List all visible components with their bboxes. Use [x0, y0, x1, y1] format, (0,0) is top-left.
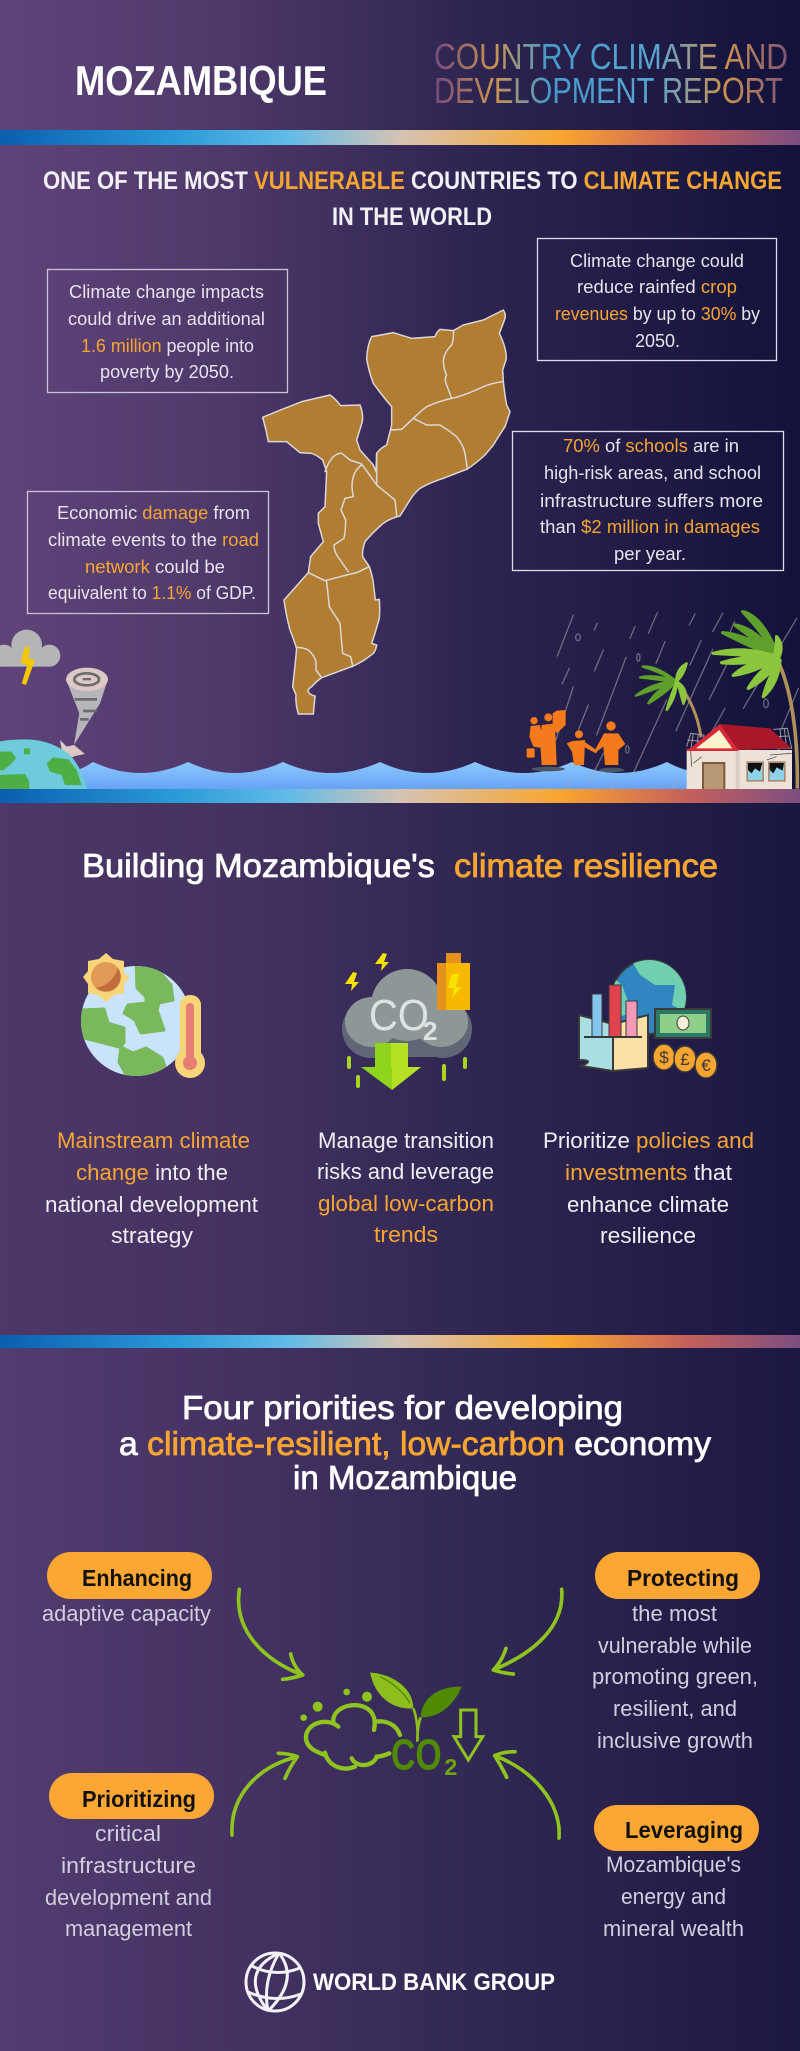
heading: four priorities: a climate-resilient, low-carbon economy: [119, 1425, 712, 1462]
priority: protecting: inclusive growth: [597, 1728, 753, 1753]
arrow: bottom left: [232, 1753, 297, 1835]
leaves: [370, 1673, 462, 1742]
callout: schools: per year.: [614, 544, 686, 564]
down arrow: [454, 1710, 483, 1760]
priority: leveraging: Mozambique's: [606, 1852, 741, 1877]
text: mainstream climate change: change into the: [76, 1160, 228, 1185]
text: mainstream climate change: strategy: [111, 1223, 193, 1248]
callout: schools: 70% of schools are in: [563, 436, 739, 456]
CO2 text: CO: [391, 1731, 442, 1779]
priority: prioritizing: Prioritizing: [82, 1786, 196, 1812]
icon: finance and world: $: [659, 1048, 669, 1067]
priority: protecting: the most: [632, 1601, 717, 1626]
priority: enhancing: [42, 1552, 212, 1626]
callout: road network: Economic damage from: [57, 503, 250, 523]
priority: prioritizing: critical: [95, 1821, 161, 1846]
icon: damaged house: [687, 724, 792, 790]
priority: leveraging: mineral wealth: [603, 1916, 744, 1941]
callout: crop revenues: Climate change could: [570, 251, 744, 271]
priority: prioritizing: management: [65, 1916, 192, 1941]
icon: small palm tree: [636, 663, 701, 737]
heading: four priorities: Four priorities for developing: [182, 1389, 623, 1426]
icon: finance and world: £: [680, 1050, 690, 1069]
priority: leveraging: [594, 1805, 759, 1941]
arrows to CO2 icon: [232, 1589, 562, 1838]
priority: protecting: resilient, and: [613, 1696, 737, 1721]
text: prioritize policies: Prioritize policies and: [543, 1128, 754, 1153]
priority: enhancing: Enhancing: [82, 1565, 192, 1591]
icon: tornado: [66, 668, 108, 745]
text: prioritize policies: resilience: [600, 1223, 696, 1248]
callout: poverty: Climate change impacts: [69, 282, 264, 302]
arrow: top right: [493, 1589, 562, 1674]
header: [75, 36, 788, 111]
report title: [434, 36, 788, 111]
callout: road network: climate events to the road: [48, 530, 259, 550]
priority: protecting: [592, 1552, 760, 1753]
callout: poverty: 1.6 million people into: [81, 336, 254, 356]
icon: CO2 reduction plant: [300, 1673, 483, 1780]
text: mainstream climate change: national development: [45, 1192, 258, 1217]
text: mainstream climate change: [45, 1128, 258, 1248]
cloud outline: [306, 1705, 400, 1769]
icon: warming globe: [80, 953, 205, 1082]
callout: poverty: [48, 270, 288, 392]
icon: large palm tree: [713, 612, 797, 789]
heading: most vulnerable countries: [43, 167, 782, 231]
callout: schools: [512, 432, 784, 570]
text: manage transition risks: trends: [374, 1222, 438, 1247]
priority: protecting: Protecting: [627, 1565, 739, 1591]
text: prioritize policies: enhance climate: [567, 1192, 729, 1217]
priority: leveraging: energy and: [621, 1884, 726, 1909]
priority: enhancing: adaptive capacity: [42, 1601, 211, 1626]
title: Mozambique: MOZAMBIQUE: [75, 57, 327, 104]
heading: four priorities: [119, 1389, 712, 1496]
map of Mozambique: [263, 310, 510, 714]
heading: most vulnerable countries: IN THE WORLD: [332, 203, 492, 231]
callout: schools: high-risk areas, and school: [544, 463, 761, 483]
heading: most vulnerable countries: ONE OF THE MOST VULNERABLE COUNTRIES TO CLIMATE CHANGE: [43, 167, 782, 195]
rain: [556, 613, 798, 788]
text: manage transition risks: Manage transition: [318, 1128, 494, 1153]
priority: prioritizing: [45, 1773, 214, 1941]
callout: crop revenues: reduce rainfed crop: [577, 277, 737, 297]
icon: CO2 cloud and battery: [342, 953, 472, 1090]
text: manage transition risks: risks and leverage: [317, 1159, 494, 1184]
heading: four priorities: in Mozambique: [293, 1459, 517, 1496]
callout: poverty: could drive an additional: [68, 309, 265, 329]
text: manage transition risks: global low-carbon: [318, 1191, 494, 1216]
priority: prioritizing: development and: [45, 1885, 212, 1910]
text: mainstream climate change: Mainstream climate: [57, 1128, 250, 1153]
arrow: bottom right: [495, 1752, 559, 1838]
flood water: [60, 762, 720, 789]
callout: crop revenues: revenues by up to 30% by: [555, 304, 760, 324]
icon: CO2 cloud and battery: 2: [423, 1016, 437, 1046]
icon: finance and world: [579, 950, 717, 1078]
callout: road network: equivalent to 1.1% of GDP.: [48, 583, 256, 603]
callout: crop revenues: [538, 238, 776, 360]
text: manage transition risks: [317, 1128, 494, 1247]
priority: leveraging: Leveraging: [625, 1817, 743, 1843]
callout: crop revenues: 2050.: [635, 331, 680, 351]
logo: World Bank Group: [246, 1953, 555, 2011]
logo: World Bank Group: WORLD BANK GROUP: [313, 1969, 555, 1996]
icon: finance and world: €: [701, 1056, 711, 1075]
icon: storm cloud: [0, 630, 60, 685]
callout: schools: than $2 million in damages: [540, 517, 760, 537]
heading: climate resilience: Building Mozambique's climate resilience: [82, 847, 718, 884]
CO2 text: 2: [444, 1754, 457, 1780]
callout: schools: infrastructure suffers more: [540, 491, 763, 511]
icon: storm over earth: [0, 630, 108, 789]
icon: family wading: [527, 710, 625, 772]
callout: road network: network could be: [85, 557, 225, 577]
priority: protecting: promoting green,: [592, 1664, 758, 1689]
flood scene: [527, 612, 798, 790]
icon: CO2 cloud and battery: CO: [369, 991, 429, 1040]
icon: earth: [0, 739, 87, 789]
logo globe: [246, 1953, 304, 2011]
priority: prioritizing: infrastructure: [61, 1853, 196, 1878]
text: prioritize policies: investments that: [565, 1160, 732, 1185]
callout: poverty: poverty by 2050.: [100, 362, 234, 382]
text: prioritize policies: [543, 1128, 754, 1248]
priority: protecting: vulnerable while: [598, 1633, 752, 1658]
arrow: top left: [239, 1589, 303, 1679]
callout: road network: [28, 492, 268, 614]
